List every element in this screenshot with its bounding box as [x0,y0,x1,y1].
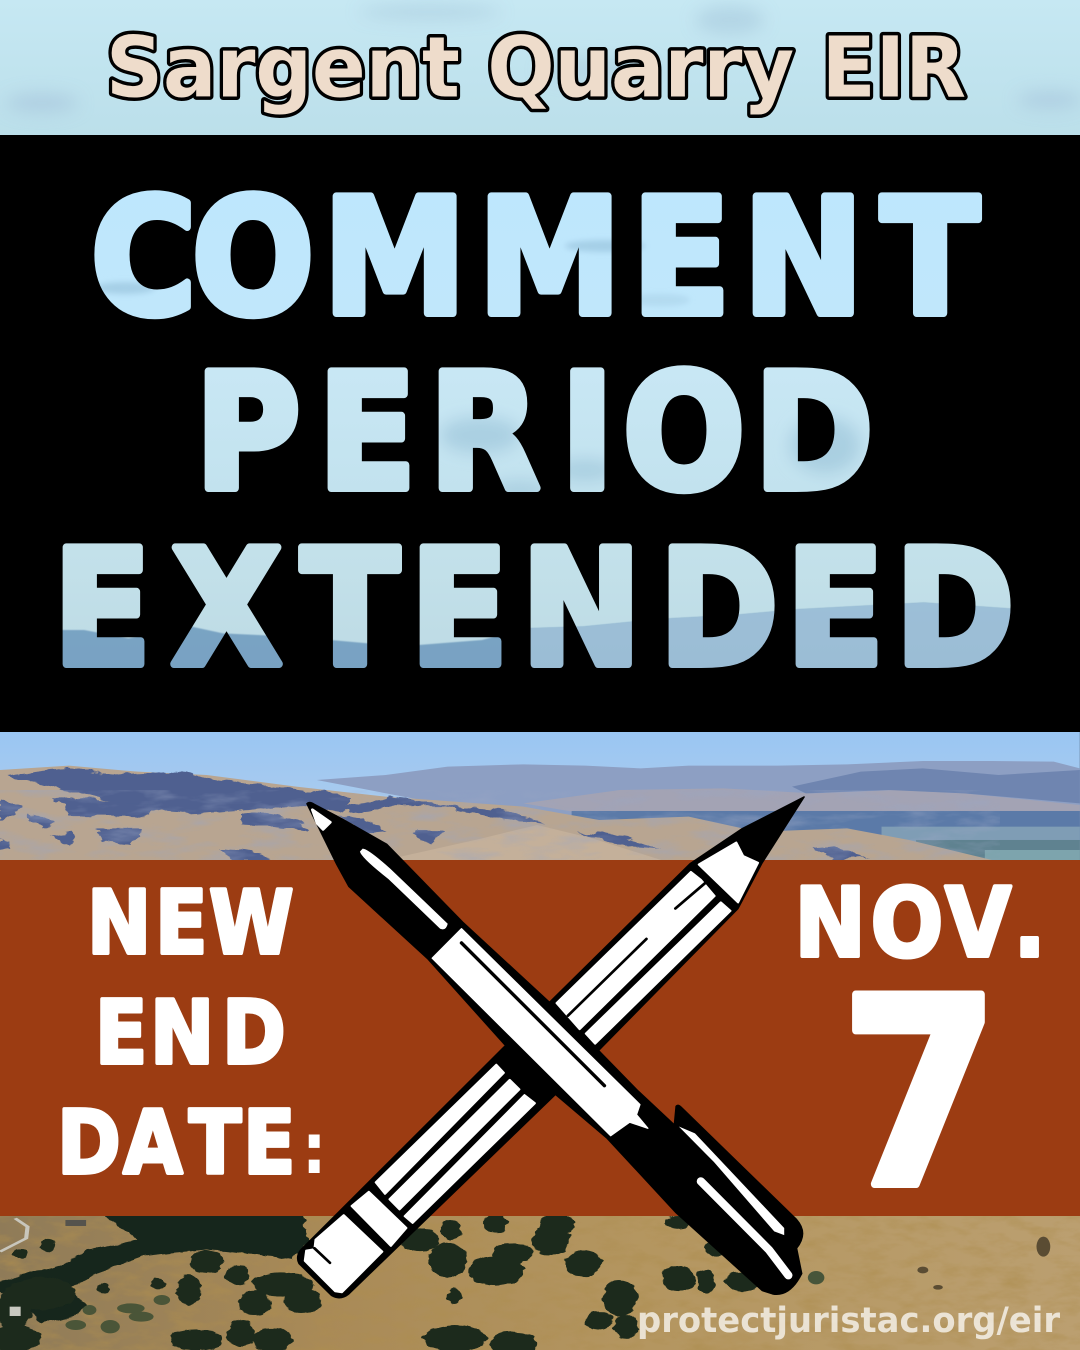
text: nov. 7: 7 [840,943,1000,1246]
clouds and ridge seen through the letters [40,240,1030,673]
text: new end date: NEW [87,873,294,974]
texture: hill shading [0,790,1000,860]
band: rust date strip [0,860,1080,1216]
photo: distant hills [0,732,1080,865]
icon: pen [307,802,803,1294]
sky photo header [0,0,1080,136]
headline line: COMMENT: COMMENT [91,165,979,351]
text: website url: protectjuristac.org/eir [637,1301,1061,1341]
photo: oak trees [0,1214,1050,1350]
icon: pencil [298,797,804,1298]
headline line: PERIOD: PERIOD [195,340,874,526]
title: Sargent Quarry EIR [106,18,966,116]
text: new end date: : [302,1108,326,1190]
texture: dry grass [0,1216,1080,1350]
text: nov. 7: NOV. [794,869,1046,979]
photo: ground base [0,1210,1080,1350]
text: nov. 7 [794,869,1046,1246]
text: new end date: DATE [57,1093,295,1194]
headline line: EXTENDED: EXTENDED [53,516,1014,702]
panel: headline [0,135,1080,732]
text: new end date: END [95,983,286,1084]
text: new end date [57,873,326,1194]
near hills [0,766,999,862]
icon: crossed pen and pencil [298,797,804,1298]
